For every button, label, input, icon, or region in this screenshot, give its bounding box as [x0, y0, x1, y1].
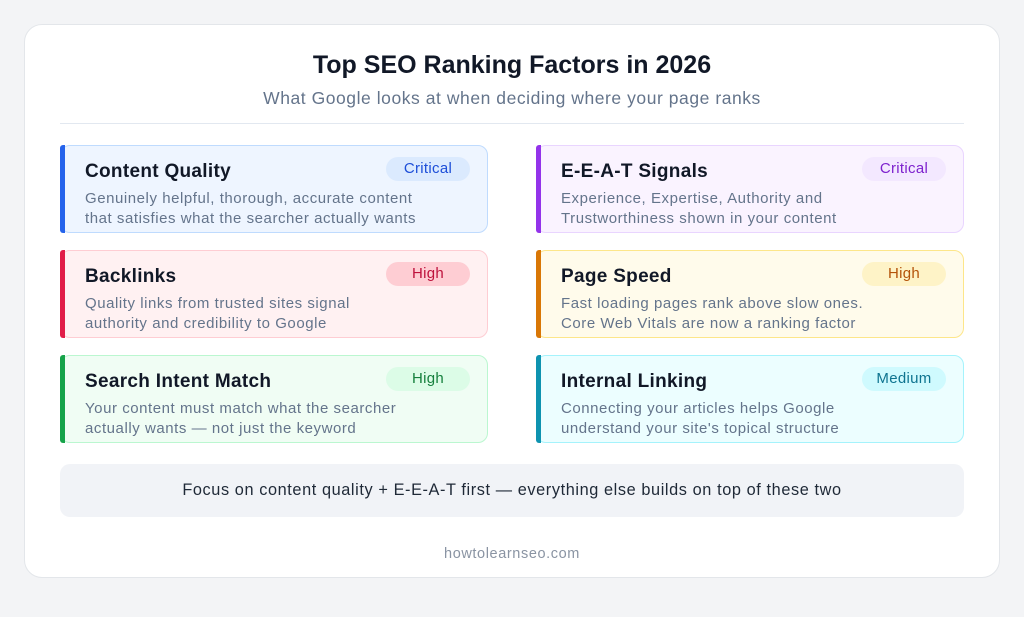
card: content quality — [60, 145, 488, 233]
card: page speed: Core Web Vitals are now a ranking factor — [561, 315, 856, 332]
card: backlinks: authority and credibility to Google — [85, 315, 327, 332]
card: search intent: actually wants — not just the keyword — [85, 420, 356, 437]
card: internal linking: Connecting your articles helps Google — [561, 400, 835, 417]
card: search intent: Your content must match what the searcher — [85, 400, 396, 417]
card: page speed: Fast loading pages rank above slow ones. — [561, 295, 863, 312]
card: backlinks: High — [412, 265, 444, 282]
subtitle: What Google looks at when deciding where your page ranks — [263, 88, 761, 108]
card: internal linking: understand your site's topical structure — [561, 420, 839, 437]
card: page speed — [536, 250, 964, 338]
card: eeat: E-E-A-T Signals — [561, 161, 708, 182]
card: backlinks: Quality links from trusted sites signal — [85, 295, 350, 312]
card: search intent: High — [412, 370, 444, 387]
title: Top SEO Ranking Factors in 2026 — [313, 51, 711, 79]
callout — [60, 464, 964, 517]
card: backlinks — [60, 250, 488, 338]
source: howtolearnseo.com — [444, 546, 580, 562]
card: content quality: Content Quality — [85, 161, 231, 182]
card: internal linking — [536, 355, 964, 443]
card: search intent: Search Intent Match — [85, 371, 271, 392]
card: backlinks: Backlinks — [85, 266, 176, 287]
card: content quality: Genuinely helpful, thorough, accurate content that satisfies what the searcher actually wants — [85, 190, 416, 227]
callout: Focus on content quality + E-E-A-T first — everything else builds on top of these two — [182, 481, 842, 499]
card: internal linking: Internal Linking — [561, 371, 707, 392]
card: eeat: Critical — [880, 160, 928, 177]
card: content quality: Critical — [404, 160, 452, 177]
card: eeat: Experience, Expertise, Authority and Trustworthiness shown in your content — [561, 190, 837, 227]
card: eeat — [536, 145, 964, 233]
card: search intent — [60, 355, 488, 443]
card: internal linking: Medium — [876, 370, 932, 387]
card: page speed: High — [888, 265, 920, 282]
card: page speed: Page Speed — [561, 266, 672, 287]
